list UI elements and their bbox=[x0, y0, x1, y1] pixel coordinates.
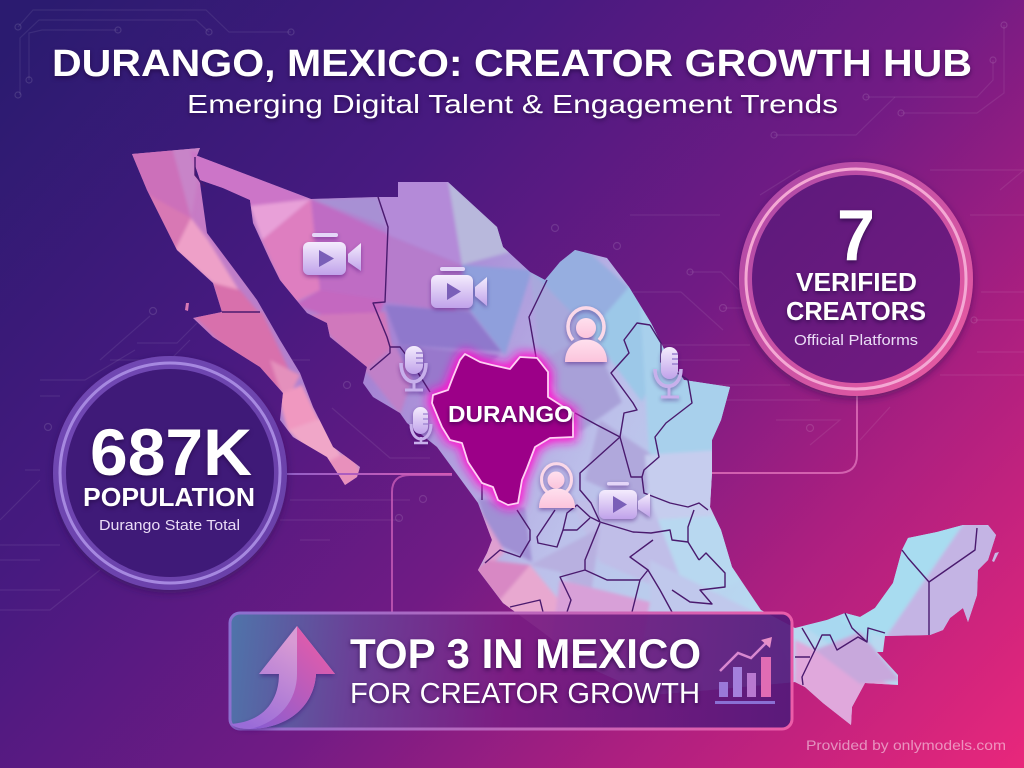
subtitle: Emerging Digital Talent & Engagement Trends bbox=[187, 89, 838, 119]
stat label: verified creators: CREATORS bbox=[786, 296, 926, 326]
stat note: Official Platforms bbox=[794, 332, 918, 349]
title: DURANGO, MEXICO: CREATOR GROWTH HUB bbox=[52, 43, 972, 85]
map of Mexico bbox=[120, 140, 1010, 740]
icon: creator person 1 bbox=[565, 308, 607, 362]
stat circle: population bbox=[53, 356, 287, 590]
banner subline: FOR CREATOR GROWTH bbox=[350, 678, 700, 710]
islands bbox=[185, 303, 189, 311]
map fill: low-poly regions bbox=[120, 140, 1010, 740]
stat label: verified creators: VERIFIED bbox=[796, 267, 917, 297]
Durango highlighted state bbox=[432, 354, 573, 505]
stat note: Durango State Total bbox=[99, 517, 240, 534]
Durango label: DURANGO bbox=[448, 401, 573, 427]
icon: microphone 3 bbox=[655, 347, 681, 397]
stat circle: verified creators bbox=[739, 162, 973, 396]
icon: video camera 2 bbox=[431, 267, 487, 308]
stat label: population: POPULATION bbox=[83, 482, 255, 512]
icon: video camera 3 bbox=[599, 482, 650, 519]
icon: growth arrow bbox=[231, 626, 335, 729]
title block bbox=[52, 43, 972, 119]
stat value: 7: 7 bbox=[837, 196, 875, 276]
banner headline: TOP 3 IN MEXICO bbox=[350, 630, 701, 677]
icon: microphone 1 bbox=[401, 346, 426, 390]
stat value: 687K: 687K bbox=[90, 415, 252, 489]
icon: video camera 1 bbox=[303, 233, 361, 275]
state borders bbox=[195, 157, 977, 685]
banner: top 3 in Mexico bbox=[230, 613, 792, 729]
icon: bar chart bbox=[715, 637, 775, 704]
circuit pattern background bbox=[0, 10, 1024, 610]
watermark: Provided by onlymodels.com bbox=[806, 737, 1006, 753]
connector lines bbox=[287, 395, 857, 612]
stat label: verified creators bbox=[786, 267, 926, 326]
icon: microphone 2 bbox=[411, 407, 431, 443]
icon: creator person 2 bbox=[539, 464, 575, 508]
